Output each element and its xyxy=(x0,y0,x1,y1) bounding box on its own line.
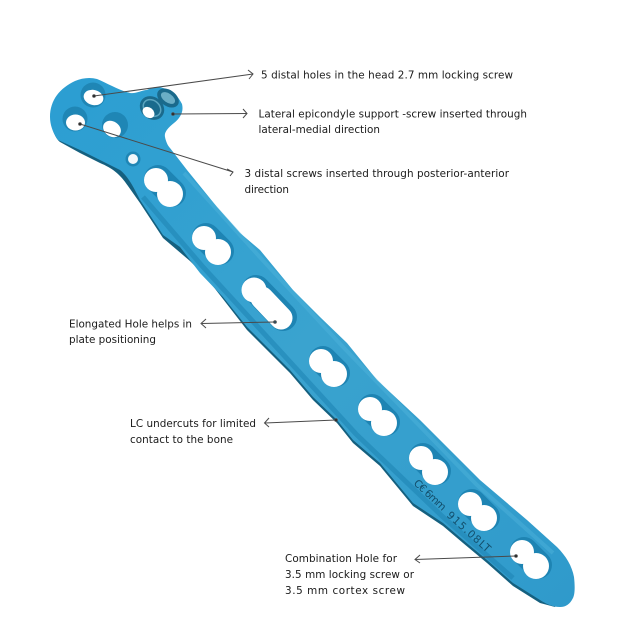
small round hole xyxy=(126,152,140,166)
label: distal holes: 5 distal holes in the head 2.7 mm locking screw xyxy=(261,70,514,82)
label: elongated hole xyxy=(69,318,192,346)
label: combination hole: 3.5 mm locking screw or xyxy=(285,569,415,581)
label: combination hole xyxy=(285,553,415,597)
head holes xyxy=(62,82,128,141)
label: distal screws: 3 distal screws inserted through posterior-anterior xyxy=(244,168,510,180)
arrow: distal screws xyxy=(79,123,233,176)
arrow: elongated hole xyxy=(201,319,276,328)
combination hole rims xyxy=(158,179,538,565)
engraved marking xyxy=(411,477,493,555)
arrow: LC undercuts xyxy=(264,418,337,427)
label: LC undercuts: contact to the bone xyxy=(130,434,233,446)
arrow: lateral epicondyle xyxy=(172,109,247,118)
engraved marking: 915.08LT xyxy=(444,509,493,555)
label: distal screws: direction xyxy=(244,184,289,196)
label: elongated hole: Elongated Hole helps in xyxy=(69,318,192,330)
highlight along upper edge xyxy=(184,173,553,553)
label: LC undercuts xyxy=(130,418,256,446)
darker band along lower edge xyxy=(143,197,513,578)
label: elongated hole: plate positioning xyxy=(69,334,156,346)
label: combination hole: 3.5 mm cortex screw xyxy=(285,585,406,597)
label: distal screws xyxy=(244,168,510,196)
plate body xyxy=(50,78,575,607)
threaded lateral holes xyxy=(135,85,182,125)
combination holes xyxy=(144,168,549,579)
label: lateral epicondyle support xyxy=(258,108,527,136)
label: LC undercuts: LC undercuts for limited xyxy=(130,418,256,430)
label: lateral epicondyle support: Lateral epicondyle support -screw inserted through xyxy=(258,108,527,120)
label: lateral epicondyle support: lateral-medial direction xyxy=(258,124,380,136)
plate underside shadow edge xyxy=(52,125,560,607)
arrow: combination hole xyxy=(415,555,517,563)
bone plate xyxy=(50,78,575,607)
arrow: distal holes xyxy=(93,70,253,97)
label: combination hole: Combination Hole for xyxy=(285,553,398,565)
engraved marking: C€ 6mm xyxy=(411,477,448,513)
